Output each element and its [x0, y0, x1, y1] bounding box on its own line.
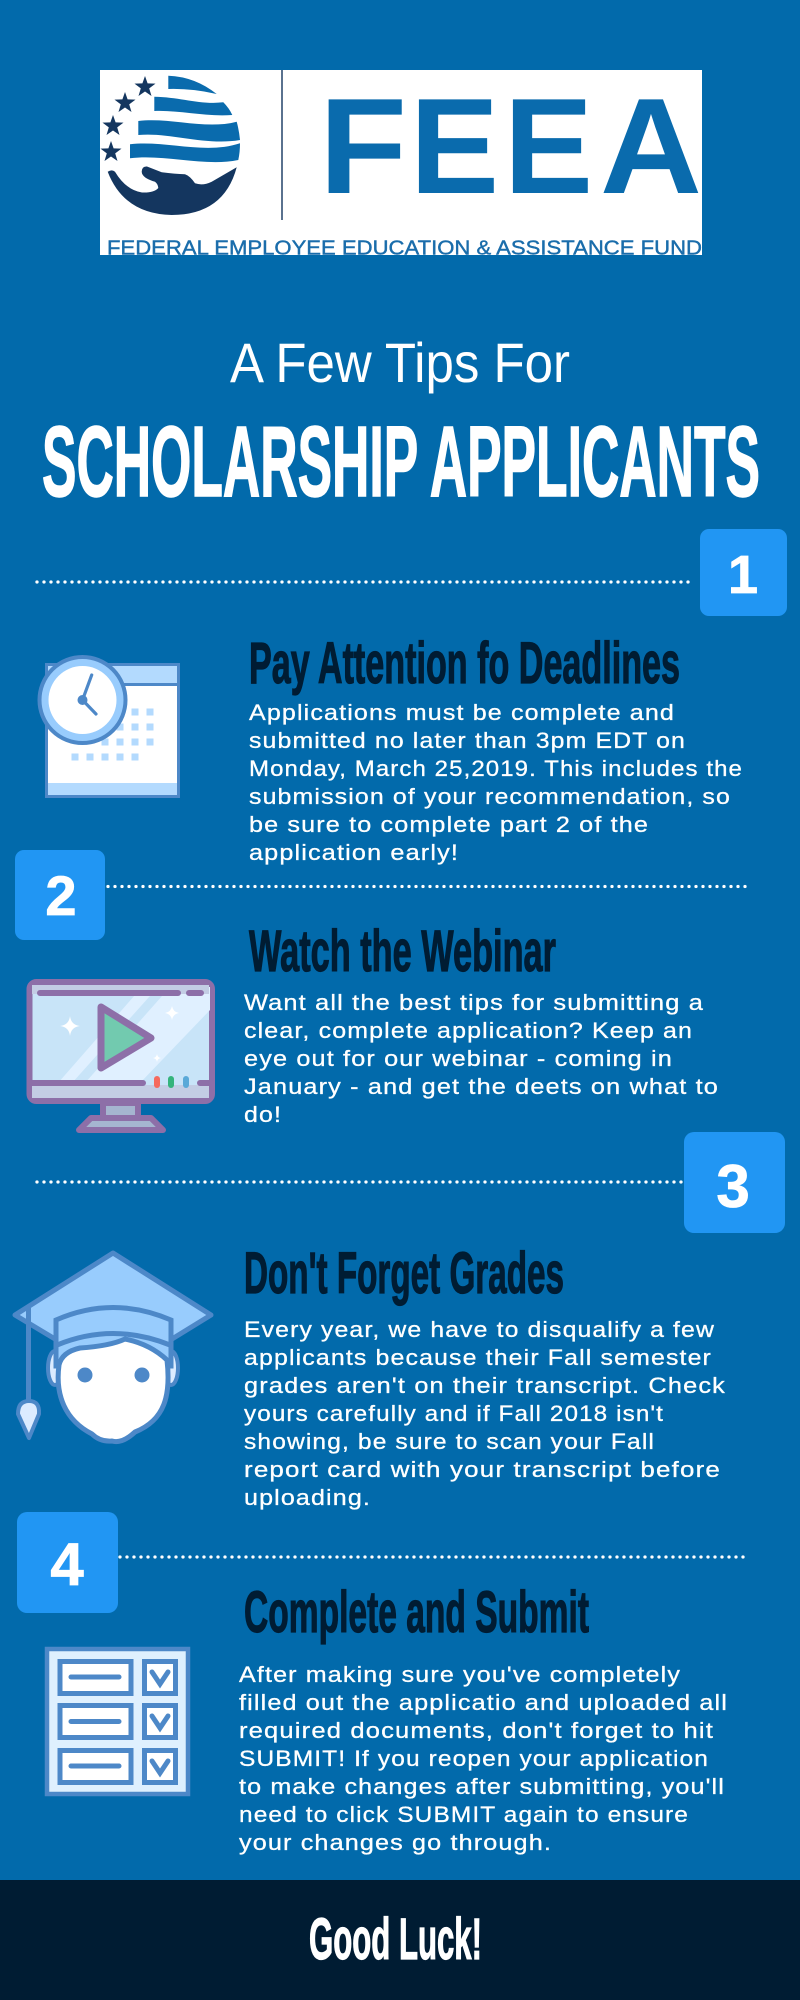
body text 1: Monday, March 25,2019. This includes the: [249, 756, 743, 781]
body text 1: submission of your recommendation, so: [249, 784, 731, 809]
body text 4: to make changes after submitting, you'll: [239, 1774, 725, 1799]
body text 1: be sure to complete part 2 of the: [249, 812, 649, 837]
body text 4: After making sure you've completely: [239, 1662, 681, 1687]
body text 3: Every year, we have to disqualify a few: [244, 1317, 715, 1342]
body text 3: applicants because their Fall semester: [244, 1345, 712, 1370]
number badge 2: 2: [45, 864, 77, 927]
divider: [281, 70, 283, 220]
body text 1: Applications must be complete and: [249, 700, 675, 725]
body text 3: showing, be sure to scan your Fall: [244, 1429, 655, 1454]
wordmark: E: [410, 70, 499, 222]
icon: globe emblem with stars and hand: [100, 76, 240, 215]
body text 4: filled out the applicatio and uploaded all: [239, 1690, 728, 1715]
body text 2: January - and get the deets on what to: [244, 1074, 719, 1099]
wordmark: F: [319, 70, 407, 222]
number badge 3: [684, 1132, 785, 1233]
body text 4: required documents, don't forget to hit: [239, 1718, 714, 1743]
icon: checklist form: [47, 1649, 188, 1794]
panel: tip 3 grades: [15, 1132, 785, 1510]
heading: Watch the Webinar: Watch the Webinar: [249, 919, 556, 984]
footer band: [0, 1880, 800, 2000]
footer text: Good Luck!: Good Luck!: [309, 1907, 482, 1972]
wordmark: E: [504, 70, 593, 222]
panel: tip 4 submit: [17, 1512, 746, 1855]
body text 2: [244, 990, 719, 1127]
number badge 3: 3: [716, 1153, 750, 1220]
icon: calendar and clock: [40, 657, 178, 796]
body text 3: [244, 1317, 726, 1510]
body text 1: application early!: [249, 840, 459, 865]
body text 4: SUBMIT! If you reopen your application: [239, 1746, 709, 1771]
body text 1: [249, 700, 743, 865]
body text 2: do!: [244, 1102, 282, 1127]
number badge 4: [17, 1512, 118, 1613]
number badge 1: [700, 529, 787, 616]
body text 4: your changes go through.: [239, 1830, 552, 1855]
body text 2: clear, complete application? Keep an: [244, 1018, 693, 1043]
body text 3: yours carefully and if Fall 2018 isn't: [244, 1401, 664, 1426]
icon: monitor with play button: [30, 982, 212, 1130]
logo: FEEA: [100, 70, 702, 260]
wordmark: [319, 70, 702, 222]
title: A Few Tips For: A Few Tips For: [230, 331, 570, 394]
body text 2: eye out for our webinar - coming in: [244, 1046, 673, 1071]
body text 3: grades aren't on their transcript. Check: [244, 1373, 726, 1398]
body text 1: submitted no later than 3pm EDT on: [249, 728, 686, 753]
number badge 1: 1: [728, 545, 758, 605]
body text 4: need to click SUBMIT again to ensure: [239, 1802, 689, 1827]
panel: tip 1 deadlines: [37, 529, 787, 865]
wordmark: A: [600, 70, 702, 222]
body text 3: uploading.: [244, 1485, 371, 1510]
panel: tip 2 webinar: [15, 850, 750, 1130]
body text 3: report card with your transcript before: [244, 1457, 721, 1482]
body text 4: [239, 1662, 728, 1855]
icon: graduate with cap: [15, 1253, 211, 1442]
heading: Don't Forget Grades: Don't Forget Grades: [244, 1241, 564, 1306]
body text 2: Want all the best tips for submitting a: [244, 990, 704, 1015]
logo tagline: FEDERAL EMPLOYEE EDUCATION & ASSISTANCE FUND: [107, 238, 702, 260]
number badge 2: [15, 850, 105, 940]
number badge 4: 4: [50, 1531, 84, 1598]
